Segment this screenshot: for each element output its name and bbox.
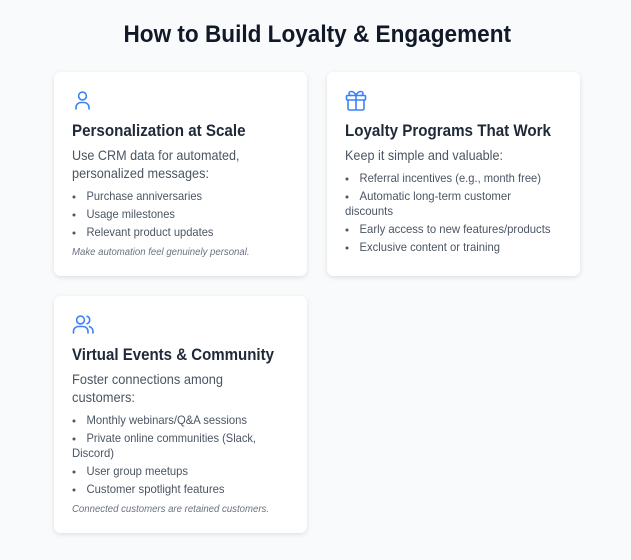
list: loyalty tactics: Automatic long-term customer <box>360 189 511 203</box>
list: personalization tactics: Usage milestones <box>86 207 175 221</box>
panel: personalization at scale <box>54 72 307 276</box>
list: community tactics: Discord) <box>72 446 114 460</box>
list: community tactics: Customer spotlight features <box>86 482 225 496</box>
panel: loyalty programs <box>327 72 580 276</box>
intro text: personalization <box>72 147 240 181</box>
list: personalization tactics: Purchase anniversaries <box>86 189 202 203</box>
intro text: loyalty: Keep it simple and valuable: <box>345 147 503 163</box>
panel: virtual events and community <box>54 296 307 533</box>
list: community tactics: Private online communities (Slack, <box>86 431 256 445</box>
icon: user <box>76 92 89 109</box>
list: personalization tactics: Relevant product updates <box>86 225 214 239</box>
icon: users <box>74 316 93 333</box>
intro text: virtual events <box>72 371 223 405</box>
list: community tactics <box>72 413 256 496</box>
intro text: personalization: personalized messages: <box>72 165 209 181</box>
list: loyalty tactics: discounts <box>345 204 393 218</box>
list: community tactics: User group meetups <box>86 464 188 478</box>
heading: personalization: Personalization at Scale <box>72 122 246 140</box>
list: loyalty tactics: Exclusive content or training <box>360 240 500 254</box>
list: loyalty tactics: Early access to new features/products <box>360 222 551 236</box>
intro text: personalization: Use CRM data for automated, <box>72 147 240 163</box>
note: virtual events: Connected customers are retained customers. <box>72 504 269 515</box>
note: personalization: Make automation feel genuinely personal. <box>72 247 250 258</box>
heading: virtual events: Virtual Events & Community <box>72 346 274 364</box>
intro text: virtual events: customers: <box>72 389 135 405</box>
list: loyalty tactics <box>345 171 551 254</box>
icon: gift <box>346 92 366 110</box>
title: How to Build Loyalty & Engagement <box>124 21 511 48</box>
heading: loyalty: Loyalty Programs That Work <box>345 122 552 140</box>
list: community tactics: Monthly webinars/Q&A sessions <box>86 413 247 427</box>
list: personalization tactics <box>72 189 214 239</box>
list: loyalty tactics: Referral incentives (e.g., month free) <box>360 171 541 185</box>
intro text: virtual events: Foster connections among <box>72 371 223 387</box>
